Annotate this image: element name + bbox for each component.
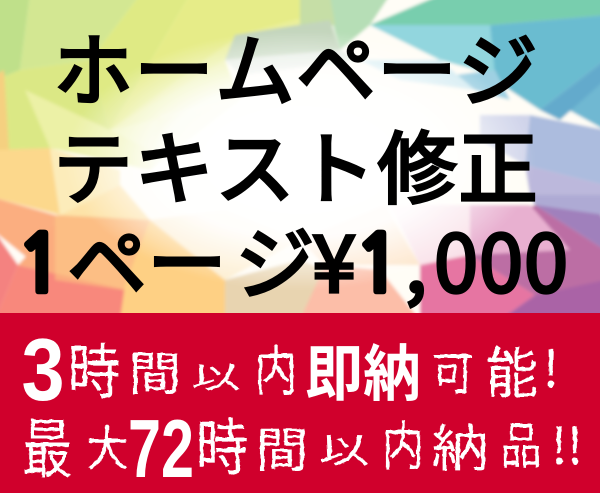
- headline: ready within 3 hours: [21, 320, 559, 419]
- headline: delivery within max 72 hours: 以: [319, 423, 369, 474]
- headline: delivery within max 72 hours: 時: [196, 399, 248, 487]
- headline: delivery within max 72 hours: 納: [431, 408, 489, 481]
- title line 1: ー: [378, 7, 456, 122]
- title line 3: price: ー: [148, 200, 226, 315]
- headline: delivery within max 72 hours: !!: [551, 407, 583, 479]
- title line 3: price: 1: [354, 226, 402, 304]
- title line 3: price: ペ: [68, 200, 146, 315]
- headline: ready within 3 hours: 能: [486, 331, 538, 409]
- title line 2: キ: [134, 105, 214, 220]
- headline: ready within 3 hours: !: [543, 330, 559, 402]
- title line 2: テ: [54, 105, 132, 220]
- title line 3: price: 1: [16, 226, 64, 304]
- title line 1: ペ: [296, 7, 376, 122]
- headline: ready within 3 hours: 以: [191, 353, 241, 397]
- headline: delivery within max 72 hours: 大: [86, 410, 128, 481]
- title line 1: ジ: [458, 7, 538, 122]
- title line 1: ホ: [54, 7, 132, 122]
- headline: delivery within max 72 hours: 最: [22, 397, 72, 491]
- title line 3: price: ジ: [236, 200, 314, 315]
- headline: ready within 3 hours: 間: [129, 338, 181, 404]
- headline: ready within 3 hours: 納: [363, 325, 421, 413]
- headline: delivery within max 72 hours: 間: [256, 413, 308, 481]
- headline: ready within 3 hours: 内: [255, 328, 297, 406]
- headline: delivery within max 72 hours: [22, 397, 583, 493]
- headline: delivery within max 72 hours: 72: [128, 402, 194, 493]
- title line 3: price: 0: [434, 200, 478, 315]
- title line 3: price: ,: [405, 200, 427, 315]
- title line 2: 修: [378, 105, 456, 220]
- headline: ready within 3 hours: 即: [305, 325, 363, 413]
- title line 2: ト: [296, 105, 376, 220]
- background: low-poly rainbow: [0, 0, 600, 320]
- title line 1: ム: [216, 7, 294, 122]
- title line 3: price: 0: [524, 200, 568, 315]
- title line 2: 正: [458, 105, 538, 220]
- red band: [0, 313, 600, 493]
- headline: ready within 3 hours: 時: [68, 325, 120, 411]
- headline: ready within 3 hours: 3: [21, 320, 65, 419]
- title line 2: ス: [216, 105, 294, 220]
- title line 1: ー: [134, 7, 214, 122]
- headline: delivery within max 72 hours: 内: [382, 405, 424, 480]
- headline: ready within 3 hours: 可: [432, 337, 474, 404]
- title line 3: price: 0: [479, 200, 523, 315]
- headline: delivery within max 72 hours: 品: [501, 408, 541, 478]
- title line 3: price: ¥: [312, 200, 356, 315]
